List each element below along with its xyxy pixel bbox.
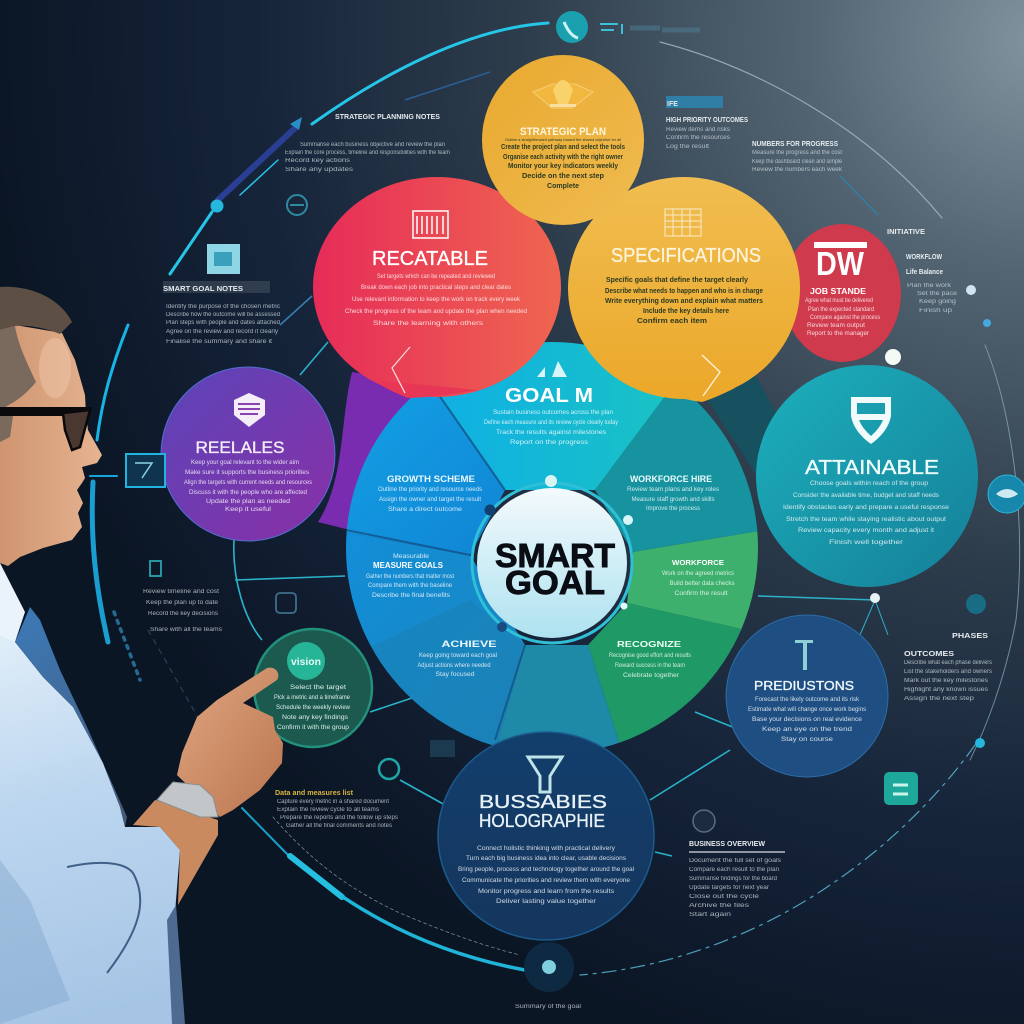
teal backing wedge [700, 375, 780, 480]
text block: top right notes: IFE [667, 101, 678, 108]
panel: left segment text: Measurable [393, 553, 429, 560]
body: Stretch the team while staying realistic about output [786, 516, 946, 523]
text block: lower right notes: Describe what each phase delivers [904, 660, 992, 666]
body: Schedule the weekly review [276, 705, 351, 711]
text block: top right notes: HIGH PRIORITY OUTCOMES [666, 117, 748, 124]
icon: mountains [537, 361, 567, 377]
panel: lower left segment text: Stay focused [436, 671, 475, 678]
icon: building [413, 211, 448, 238]
body text: Define each measure and its review cycle clearly today [484, 419, 619, 426]
panel: left segment text: MEASURE GOALS [373, 561, 444, 570]
text block: bottom caption: Summary of the goal [515, 1004, 581, 1010]
panel: upper left segment text [378, 474, 483, 513]
text block: left note: Describe how the outcome will be assessed [166, 312, 280, 318]
hand [177, 668, 283, 817]
body: Update the plan as needed [206, 498, 290, 505]
text block: lower right notes: PHASES [952, 633, 988, 640]
body: Note any key findings [282, 715, 348, 721]
text block: top right notes: Confirm the resources [666, 135, 730, 141]
icon: lower right teal [884, 772, 918, 805]
text block: lower left notes: Capture every metric in a shared document [277, 799, 389, 805]
segment: bottom teal [498, 645, 620, 748]
body: Create the project plan and select the tools [501, 144, 625, 151]
text block: bottom right notes: Document the full set of goals [689, 858, 781, 864]
heading: HOLOGRAPHIE [479, 811, 605, 831]
icon: box left [207, 244, 240, 274]
text block: bottom right notes: BUSINESS OVERVIEW [689, 841, 765, 848]
text block: left note: SMART GOAL NOTES [163, 286, 243, 293]
text block: lower right notes: Assign the next step [904, 696, 975, 702]
text block: lower right notes: Mark out the key milestones [904, 678, 988, 684]
body: Make sure it supports the business priorities [185, 469, 310, 476]
text block: left small notes [143, 589, 222, 633]
panel: SMART wheel [346, 342, 758, 748]
forearm [133, 800, 218, 905]
text block: left note: Agree on the review and record it clearly [166, 329, 278, 335]
body: Connect holistic thinking with practical delivery [477, 845, 616, 852]
body text: Track the results against milestones [496, 429, 607, 436]
neck and face [0, 325, 102, 566]
icon: top teal node [556, 11, 588, 43]
heading: REELALES [196, 438, 284, 457]
body [783, 480, 949, 546]
body: Align the targets with current needs and resources [184, 479, 313, 486]
text block: lower right notes: Highlight any known issues [904, 687, 988, 693]
icon: small rings lower left [379, 740, 455, 779]
segment: lower left blue [346, 532, 525, 745]
segment: lower right green [588, 603, 742, 743]
panel: upper left segment text: Share a direct outcome [388, 506, 462, 513]
panel: goal top text [484, 361, 619, 446]
body: Base your decisions on real evidence [752, 716, 862, 723]
body: Review team output [807, 322, 865, 329]
sideburn [0, 416, 13, 442]
connector lines [234, 72, 888, 856]
icon: small upper ring lower right [693, 810, 715, 832]
text block: lower right notes: List the stakeholders and owners [904, 669, 992, 675]
body: Monitor progress and learn from the results [478, 888, 615, 895]
heading: SMART GOAL: SMART [495, 537, 615, 574]
text block: upper left note: Record key actions [285, 158, 350, 164]
purple backing wedge [318, 372, 430, 530]
callout tick [702, 355, 720, 396]
body: Discuss it with the people who are affected [189, 489, 307, 496]
body: Agree what must be delivered [805, 297, 873, 304]
panel: right green segment text: Confirm the result [674, 590, 728, 597]
text block: right notes: Set the pace [917, 291, 958, 297]
heading [479, 792, 607, 831]
text block: top right notes: Review items and risks [666, 127, 730, 133]
text block: upper left note: STRATEGIC PLANNING NOTES [335, 114, 440, 121]
icon: node on arc [210, 200, 224, 212]
figure: businessman [0, 287, 283, 1024]
panel: small red circle [783, 224, 901, 362]
text block: bottom right notes: Summarise findings for the board [689, 876, 777, 882]
circle tip [372, 380, 478, 398]
panel: red RECATABLE circle [313, 177, 561, 398]
panel: upper right segment text: Measure staff growth and skills [632, 496, 715, 503]
text block: lower left notes: Prepare the reports and the follow up steps [280, 815, 398, 821]
sleeve shade [0, 860, 70, 1024]
heading: goal: GOAL M [505, 385, 593, 407]
icon: ring upper left [287, 195, 307, 215]
body: Specific goals that define the target clearly [606, 277, 748, 284]
panel: lower right segment text: RECOGNIZE [617, 639, 681, 649]
text block: lower left notes: Gather all the final comments and notes [286, 823, 392, 829]
body: Keep an eye on the trend [762, 726, 852, 733]
text block: left small notes: Review timeline and cost [143, 589, 219, 595]
text block: lower left notes [275, 790, 398, 829]
segment shading [372, 600, 514, 745]
body: Use relevant information to keep the work on track every week [352, 296, 521, 303]
panel: upper right segment text: Improve the process [646, 505, 701, 512]
text block: top right notes: Log the result [666, 144, 709, 150]
icon: T-tool [795, 640, 813, 670]
body: Review capacity every month and adjust it [798, 527, 934, 534]
panel: yellow SPECIFICATIONS circle [568, 177, 800, 402]
text block: bottom right notes: Archive the files [689, 903, 749, 909]
sleeve fold [67, 863, 140, 973]
segment dividers [346, 385, 525, 740]
segment: goal top [440, 342, 664, 490]
panel: lower right segment text: Celebrate together [623, 672, 680, 679]
panel: lower left segment text: Adjust actions where needed [418, 662, 491, 669]
icon: square badge [126, 454, 165, 487]
heading: SPECIFICATIONS [611, 245, 761, 267]
panel: upper left segment text: Outline the priority and resource needs [378, 486, 483, 493]
body [274, 685, 351, 731]
panel: upper left segment text: Assign the owner and target the result [379, 496, 481, 503]
panel: lower right segment text [609, 639, 692, 679]
text block: top right notes: NUMBERS FOR PROGRESS [752, 141, 838, 148]
body: Monitor your key indicators weekly [508, 163, 618, 170]
text block: lower right notes: OUTCOMES [904, 651, 954, 658]
body: Compare against the process [810, 314, 881, 321]
text block: bottom right notes: Compare each result to the plan [689, 867, 779, 873]
panel: right green segment text: WORKFORCE [672, 558, 724, 567]
panel: upper right segment text: Review team plans and key roles [627, 486, 720, 493]
text block: upper left note: Summarise each business objective and review the plan [300, 142, 445, 148]
text block: right notes: Finish up [919, 308, 953, 314]
panel: teal ATTAINABLE circle [756, 365, 978, 587]
lower tie [167, 905, 185, 1024]
icon: shield stack [234, 393, 265, 427]
panel: left segment text [366, 553, 454, 599]
panel: orange top circle [482, 55, 644, 225]
panel: lower left segment text [418, 639, 498, 678]
body: Confirm each item [637, 318, 707, 325]
text block: left small notes: Share with all the teams [150, 627, 222, 633]
icon: lamp diamond [533, 80, 593, 108]
heading: SMART GOAL [495, 537, 615, 601]
panel: left segment text: Describe the final benefits [372, 592, 451, 599]
icon: funnel [528, 757, 562, 792]
body: Plan the expected standard [808, 306, 874, 313]
text block: top right notes: Keep the dashboard clean and simple [752, 159, 843, 165]
body: Consider the available time, budget and staff needs [793, 492, 940, 499]
body: Share the learning with others [373, 320, 484, 327]
side hair [0, 326, 36, 410]
glasses [0, 407, 92, 450]
body: Write everything down and explain what matters [605, 298, 763, 305]
body: Describe what needs to happen and who is in charge [605, 288, 763, 295]
body: Outline a straightforward pathway toward the shared objective for all [505, 137, 621, 142]
body: Include the key details here [643, 308, 729, 315]
heading: SMART GOAL: GOAL [505, 564, 605, 601]
heading: RECATABLE [372, 248, 488, 270]
panel: green pointer circle [254, 629, 372, 747]
icon: shield [851, 397, 891, 444]
body [805, 297, 881, 337]
icon: DW logo: DW [816, 245, 865, 282]
body: Identify obstacles early and prepare a useful response [783, 504, 949, 511]
text block: right notes: Keep going [919, 299, 956, 305]
body: Select the target [290, 685, 346, 691]
body [748, 696, 867, 743]
body: Set targets which can be repeated and reviewed [377, 273, 495, 280]
body text: Report on the progress [510, 439, 589, 446]
icon: right small rings [870, 285, 991, 748]
text block: right notes: WORKFLOW [906, 254, 942, 261]
collar [0, 563, 25, 642]
text block: left note: Identify the purpose of the chosen metric [166, 304, 280, 310]
icon: right edge ring [988, 475, 1024, 513]
text block: bottom right notes [689, 841, 785, 918]
text block: bottom right notes: Start again [689, 912, 731, 918]
body: Turn each big business idea into clear, usable decisions [466, 855, 627, 862]
body: Estimate what will change once work begins [748, 706, 867, 713]
body [184, 459, 313, 513]
panel: lower right segment text: Reward success in the team [615, 662, 685, 669]
text block: left note: Finalise the summary and share it [166, 339, 272, 345]
icon: bottom node [524, 942, 574, 992]
text block: top right notes [666, 96, 843, 173]
text block: upper left note: Explain the core process, timeline and responsibilities with the team [285, 150, 450, 156]
panel: upper left segment text: GROWTH SCHEME [387, 474, 475, 485]
text block: left note: Plan steps with people and dates attached [166, 320, 280, 326]
panel: purple REELALES circle [161, 367, 335, 541]
shirt torso and arm [0, 563, 180, 1024]
text block: left small notes: Keep the plan up to date [146, 600, 219, 606]
text block: top right notes: Review the numbers each week [752, 167, 843, 173]
body: Decide on the next step [522, 173, 604, 180]
body text [484, 409, 619, 446]
icon: teal badge: vision [291, 657, 321, 668]
tie [15, 607, 127, 827]
watch [157, 782, 218, 817]
body: Communicate the priorities and review them with everyone [462, 877, 630, 884]
body [345, 273, 527, 327]
icon: pin on arc [290, 117, 302, 130]
body: Confirm it with the group [277, 725, 350, 731]
heading: STRATEGIC PLAN [520, 126, 606, 138]
body: Report to the manager [807, 330, 870, 337]
text block: upper left note: Share any updates [285, 167, 353, 173]
body text: Sustain business outcomes across the plan [493, 409, 613, 416]
body: Keep it useful [225, 506, 272, 513]
body: Stay on course [781, 736, 833, 743]
text block: upper left note [285, 114, 450, 173]
icon: table [665, 209, 701, 236]
circle tip [660, 388, 735, 402]
body: Check the progress of the team and update the plan when needed [345, 308, 527, 315]
panel: central hub SMART GOAL [472, 475, 633, 643]
text block: bottom right notes: Update targets for next year [689, 885, 769, 891]
heading: ATTAINABLE [805, 457, 939, 479]
body [605, 277, 763, 325]
segment: upper right teal [595, 397, 758, 552]
panel: blue PREDIUSTONS circle [726, 615, 888, 777]
text block: lower right notes [904, 633, 992, 702]
body: Choose goals within reach of the group [810, 480, 928, 487]
top hair [0, 287, 72, 334]
body: Pick a metric and a timeframe [274, 695, 351, 701]
text block: left note [163, 281, 280, 345]
panel: right green segment text [662, 558, 735, 597]
heading: BUSSABIES [479, 792, 607, 812]
icon: top dashes [600, 24, 700, 34]
body: Finish well together [829, 539, 904, 546]
panel: upper right segment text [627, 474, 720, 512]
body: Bring people, process and technology together around the goal [458, 866, 635, 873]
callout tick [392, 347, 410, 393]
body: Keep your goal relevant to the wider aim [191, 459, 299, 466]
text block: right notes: INITIATIVE [887, 229, 925, 236]
panel: lower right segment text: Recognise good effort and results [609, 652, 692, 659]
body [458, 845, 635, 905]
forehead highlight [39, 338, 71, 398]
body [501, 137, 625, 190]
body: Forecast the likely outcome and its risk [755, 696, 860, 703]
panel: navy BUSSABIES circle [438, 732, 654, 940]
text block: left small notes: Record the key decisions [148, 611, 218, 617]
panel: right green segment text: Build better data checks [670, 580, 735, 587]
body: Organise each activity with the right owner [503, 154, 623, 161]
text block: right notes: Plan the work [907, 283, 952, 289]
panel: left segment text: Gather the numbers that matter most [366, 573, 454, 580]
hub nodes [484, 475, 633, 632]
text block: right notes [887, 229, 958, 314]
body: Deliver lasting value together [496, 898, 597, 905]
panel: right green segment text: Work on the agreed metrics [662, 570, 735, 577]
body: Complete [547, 183, 579, 190]
text block: lower left notes: Explain the review cycle to all teams [277, 807, 379, 813]
text block: top right notes: Measure the progress and the cost [752, 150, 842, 156]
panel: lower left segment text: Keep going toward each goal [419, 652, 498, 659]
heading: JOB STANDE [810, 286, 866, 296]
heading: PREDIUSTONS [754, 678, 854, 693]
panel: left segment text: Compare them with the baseline [368, 582, 452, 589]
icon: small left glyphs [150, 561, 296, 613]
text block: lower left notes: Data and measures list [275, 790, 354, 797]
panel: upper right segment text: WORKFORCE HIRE [630, 474, 712, 485]
segment: right green [627, 531, 758, 629]
panel: lower left segment text: ACHIEVE [442, 639, 496, 649]
segment: upper left blue [346, 396, 505, 555]
text block: bottom right notes: Close out the cycle [689, 894, 760, 900]
body: Break down each job into practical steps and clear dates [361, 284, 512, 291]
text block: right notes: Life Balance [906, 269, 943, 276]
